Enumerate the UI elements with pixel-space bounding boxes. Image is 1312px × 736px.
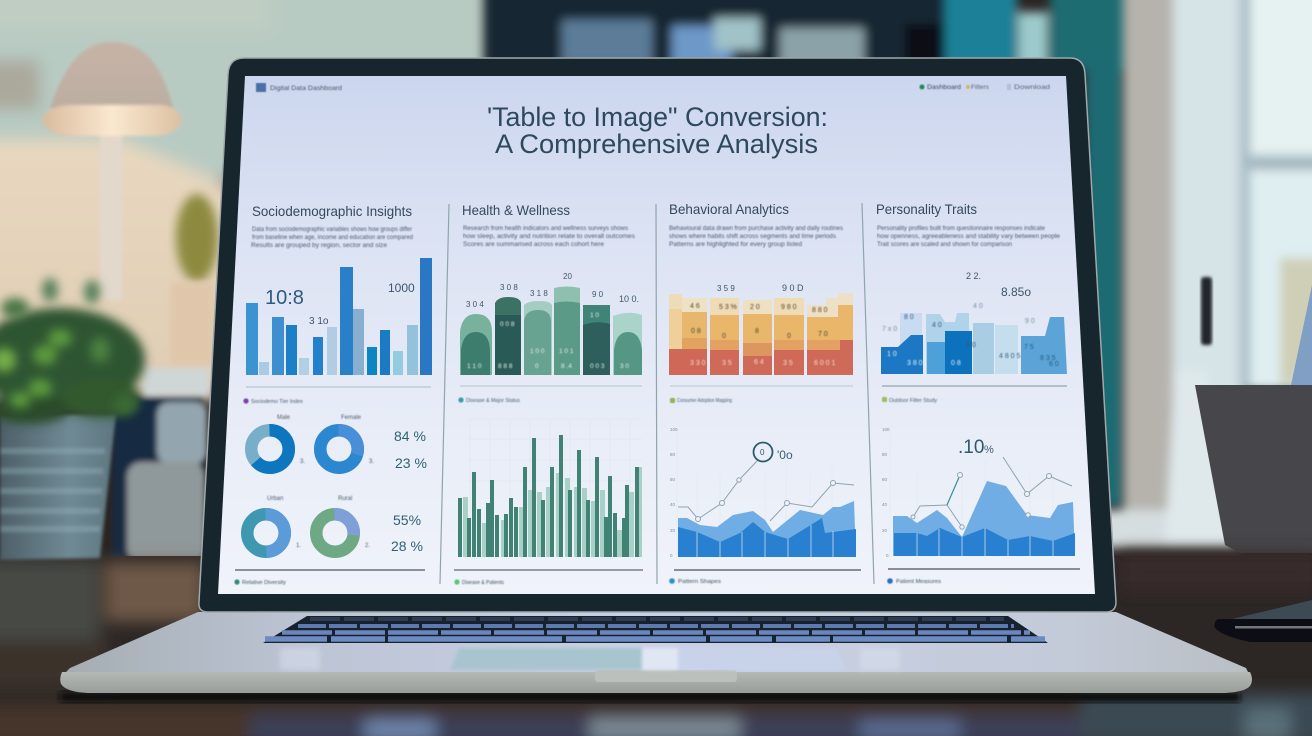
- legend: sociodemographic bottom: Relative Diversity: [242, 580, 286, 586]
- legend: sociodemographic top: Sociodemo Tier Index: [251, 399, 303, 405]
- panel: personality: [876, 201, 1080, 585]
- bar chart: personality: 8 3 5: [1040, 355, 1056, 362]
- stacked bar chart: behavioral: 8: [755, 328, 759, 335]
- bar chart: personality: 1 0: [887, 351, 897, 358]
- bar chart: personality: 4 0: [932, 322, 942, 329]
- text block: sociodemographic: [251, 227, 413, 249]
- area chart: behavioral: 40: [670, 502, 676, 507]
- donut values: 23 %: [395, 455, 427, 471]
- bar chart: personality: 3 8 0: [907, 360, 923, 367]
- legend: personality bottom: Patient Measures: [896, 579, 941, 585]
- left wall: [0, 0, 490, 400]
- text block: sociodemographic: Results are grouped by region, sector and size: [251, 243, 388, 249]
- bar chart: personality: [881, 271, 1067, 374]
- back room dark area: [485, 0, 1130, 506]
- text block: health: Research from health indicators and wellness surveys shows: [463, 226, 628, 232]
- area chart: personality: .10: [958, 437, 984, 458]
- area chart: personality: %: [984, 444, 994, 456]
- floor lamp: [42, 42, 182, 300]
- bar chart: personality: 8 0: [966, 342, 976, 349]
- bar chart: sociodemographic: 3 1o: [309, 316, 329, 327]
- trackpad: [450, 648, 846, 670]
- text block: personality: how openness, agreeableness and stability vary between people: [877, 234, 1061, 240]
- bar chart: health: 9 0: [592, 290, 604, 299]
- bar chart: health: 8 8 8: [498, 363, 513, 370]
- donut values: 84 %: [394, 428, 426, 444]
- phone on table: [1214, 600, 1312, 642]
- bar chart: health: 0 0 3: [590, 363, 605, 370]
- area chart: personality: 40: [882, 502, 888, 507]
- area chart: behavioral: 60: [670, 477, 676, 482]
- text block: behavioral: [669, 226, 843, 248]
- text block: personality: Trait scores are scaled and shown for comparison: [877, 242, 1012, 248]
- area chart: personality: 80: [882, 452, 888, 457]
- top bar: Filters: [971, 85, 989, 91]
- keyboard: [263, 616, 1048, 643]
- screen: [218, 76, 1095, 594]
- area chart: personality: 0: [886, 553, 889, 558]
- bar chart: personality: 2 2.: [966, 271, 981, 281]
- potted plant: [0, 278, 145, 560]
- laptop: [60, 58, 1252, 693]
- legend: personality top: Outdoor Filter Study: [889, 398, 937, 404]
- bar chart: health: 0 0 8: [500, 321, 515, 328]
- bar chart: health: 20: [563, 272, 572, 281]
- donut captions: 1.: [296, 543, 301, 549]
- donut captions: Female: [341, 415, 362, 421]
- top bar: [256, 83, 1050, 92]
- stacked bar chart: behavioral: 6 4: [754, 359, 764, 366]
- stacked bar chart: behavioral: 6 0 0 1: [814, 360, 836, 367]
- legend: personality bottom: [887, 578, 941, 585]
- heading: sociodemographic: Sociodemographic Insights: [252, 203, 412, 219]
- hinge notch: [595, 670, 737, 682]
- heading: personality: Personality Traits: [876, 201, 977, 217]
- stacked bar chart: behavioral: 3 5 9: [717, 284, 735, 293]
- text block: sociodemographic: Data from sociodemographic variables shows how groups differ: [252, 227, 412, 233]
- bar chart: health: [460, 272, 642, 375]
- donut captions: 2.: [365, 543, 370, 549]
- donut captions: Urban: [267, 496, 283, 502]
- stacked bar chart: behavioral: 7 0: [818, 331, 828, 338]
- bar chart: personality: 7 5: [1024, 344, 1034, 351]
- donut values: 28 %: [391, 538, 423, 554]
- text block: health: how sleep, activity and nutrition relate to overall outcomes: [463, 234, 635, 240]
- bar chart: personality: 0 8: [951, 360, 961, 367]
- text block: sociodemographic: from baseline when age, income and education are compared: [252, 235, 413, 241]
- bar chart: health: 0: [535, 363, 539, 370]
- area chart: behavioral: 0: [760, 448, 765, 457]
- bar chart: sociodemographic: 10:8: [265, 287, 304, 309]
- area chart: personality: 100: [882, 427, 890, 432]
- right background laptop: [1195, 285, 1312, 553]
- bar chart: health: 3 0 8: [500, 283, 518, 292]
- stacked bar chart: behavioral: 4 6: [690, 303, 700, 310]
- text block: health: Scores are summarised across each cohort here: [463, 242, 605, 248]
- bar chart: health: 3 1 8: [530, 289, 548, 298]
- donut values: [391, 428, 427, 554]
- bar chart: personality: 4 8 0 5: [999, 353, 1021, 360]
- legend: behavioral bottom: Pattern Shapes: [678, 579, 721, 585]
- stacked bar chart: behavioral: 0: [787, 333, 791, 340]
- title: A Comprehensive Analysis: [495, 129, 818, 159]
- stacked bar chart: behavioral: 8 8 0: [812, 307, 828, 314]
- text block: personality: Personality profiles built from questionnaire responses indicate: [877, 226, 1046, 232]
- panel: health: [454, 202, 643, 586]
- stacked bar chart: behavioral: 9 0 D: [782, 283, 804, 293]
- bar chart: health: 1 0 1: [559, 348, 574, 355]
- right window wall: [1100, 0, 1312, 548]
- donut charts: [247, 430, 358, 552]
- donut captions: 3.: [300, 459, 305, 465]
- bar chart: sociodemographic: 1000: [388, 281, 415, 295]
- stacked bar chart: behavioral: 3 3 0: [690, 360, 706, 367]
- top bar: Digital Data Dashboard: [270, 86, 342, 92]
- legend: health top: Disease & Major Status: [466, 398, 520, 404]
- bar chart: health: 8 .4: [561, 363, 572, 370]
- stacked bar chart: behavioral: 2 0: [750, 304, 760, 311]
- stacked bar chart: behavioral: 0 8: [691, 328, 701, 335]
- heading: health: Health & Wellness: [462, 202, 570, 218]
- stacked bar chart: behavioral: [669, 283, 853, 375]
- bar chart: health: 1 0: [590, 312, 599, 319]
- area chart: behavioral: 20: [670, 528, 676, 533]
- bar chart: health: 3 0 4: [466, 300, 484, 309]
- column dividers: [440, 203, 874, 584]
- stacked bar chart: behavioral: 3 5: [783, 360, 793, 367]
- donut captions: 3.: [369, 459, 374, 465]
- bar chart: health: 10 0.: [619, 294, 639, 304]
- bar chart: personality: 4 0: [973, 303, 983, 310]
- panel: sociodemographic: [234, 203, 432, 586]
- bezel: [199, 58, 1116, 612]
- area chart: personality: 60: [882, 477, 888, 482]
- donut captions: Male: [277, 415, 291, 421]
- panel: behavioral: [669, 201, 861, 585]
- door handle: [1201, 277, 1212, 345]
- area chart: personality: [882, 427, 1075, 558]
- histogram: health: [458, 419, 642, 557]
- top bar: Dashboard: [927, 85, 961, 91]
- area chart: behavioral: 0: [670, 553, 673, 558]
- title: 'Table to Image" Conversion:: [487, 102, 828, 132]
- base reflections: [280, 648, 900, 670]
- bar chart: health: 1 1 0: [467, 363, 482, 370]
- area chart: personality: 20: [882, 528, 888, 533]
- bar chart: health: 1 0 0: [530, 348, 545, 355]
- text block: behavioral: shows where habits shift across segments and time periods: [669, 234, 836, 240]
- stacked bar chart: behavioral: 0: [722, 333, 726, 340]
- area chart: behavioral: 80: [670, 452, 676, 457]
- stacked bar chart: behavioral: 5 3 %: [719, 304, 737, 311]
- stacked bar chart: behavioral: 3 5: [722, 360, 732, 367]
- donut captions: Rural: [338, 496, 352, 502]
- bar chart: personality: 6 0: [1049, 361, 1059, 368]
- text block: behavioral: Behavioural data drawn from purchase activity and daily routines: [669, 226, 843, 232]
- legend: behavioral bottom: [669, 578, 721, 585]
- small plant on sill: [113, 194, 218, 562]
- legend: health bottom: Disease & Patients: [462, 580, 504, 586]
- area chart: behavioral: '0o: [777, 448, 793, 462]
- area chart: behavioral: [670, 427, 856, 558]
- bar chart: personality: 9 0: [1025, 318, 1035, 325]
- area chart: behavioral: 100: [670, 427, 678, 432]
- text block: behavioral: Patterns are highlighted for every group listed: [669, 242, 802, 248]
- text block: personality: [877, 226, 1061, 248]
- table: [0, 552, 1312, 736]
- donut values: 55%: [393, 512, 421, 528]
- title: [487, 102, 828, 159]
- bar chart: personality: 8.85o: [1001, 285, 1031, 299]
- text block: health: [463, 226, 635, 248]
- stacked bar chart: behavioral: 9 8 0: [781, 304, 797, 311]
- bar chart: sociodemographic: [246, 258, 432, 375]
- bar chart: personality: 7 x 0: [882, 326, 897, 333]
- top bar: Download: [1014, 85, 1050, 91]
- bar chart: personality: 8 0: [904, 314, 914, 321]
- heading: behavioral: Behavioral Analytics: [669, 201, 789, 217]
- laptop base: [60, 612, 1252, 693]
- legend: behavioral top: Consumer Adoption Mapping: [677, 398, 732, 404]
- bar chart: health: 3 0: [620, 363, 629, 370]
- donut captions: [267, 415, 374, 549]
